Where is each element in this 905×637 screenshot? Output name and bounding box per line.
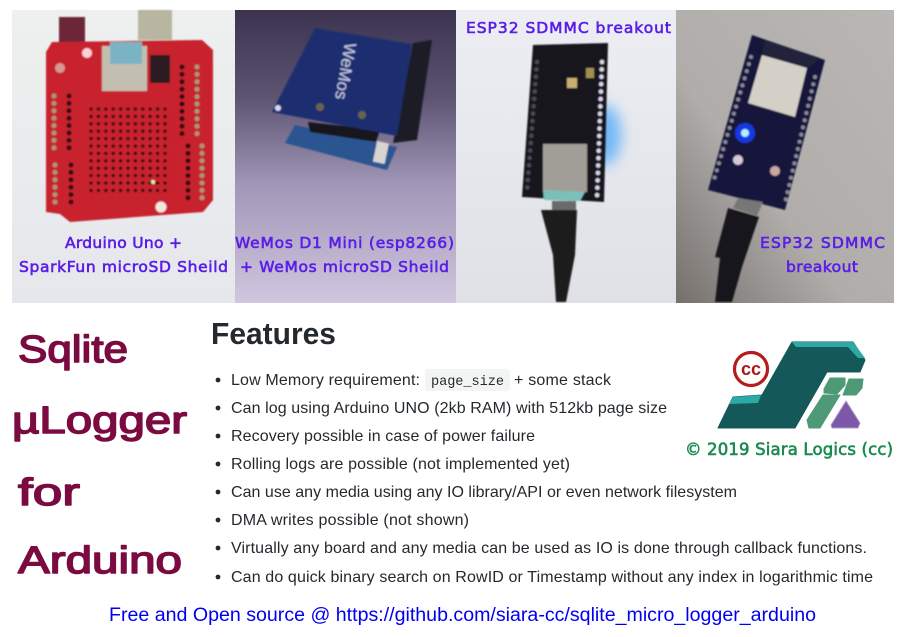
image: ESP32 dev board with cable <box>708 35 825 302</box>
title line 4: Arduino <box>18 540 182 582</box>
panel: ESP32 module photo <box>676 10 894 303</box>
caption: ESP32 SDMMC breakout: ESP32 SDMMC breakout <box>466 19 671 37</box>
bullet 5: Can use any media using any IO library/API or even network filesystem <box>231 484 737 501</box>
bullet 2: Can log using Arduino UNO (2kb RAM) with 512kb page size <box>231 400 667 417</box>
caption: WeMos D1 Mini: WeMos D1 Mini (esp8266) <box>235 234 454 252</box>
bullet 1: page_size <box>431 375 504 390</box>
bullet 4: Rolling logs are possible (not implemented yet) <box>231 456 570 473</box>
bullet 7: Virtually any board and any media can be used as IO is done through callback functions. <box>231 540 867 557</box>
image: black board with SD slot and cable <box>522 43 608 302</box>
image: WeMos D1 Mini board <box>272 28 432 170</box>
feature list <box>216 369 873 586</box>
image: WeMos D1 Mini board: WeMos <box>331 41 360 101</box>
caption: ESP32 SDMMC: ESP32 SDMMC <box>760 234 885 252</box>
logo shape: green blocks <box>807 378 863 428</box>
bullet 3: Recovery possible in case of power failure <box>231 428 535 445</box>
caption: SparkFun shield: SparkFun microSD Sheild <box>19 258 228 276</box>
logo: Siara Logics <box>685 342 893 459</box>
footer: source link text: Free and Open source @ https://github.com/siara-cc/sqlite_micro_logger_arduino <box>109 605 816 626</box>
bullet 1 <box>216 369 612 391</box>
title line 1: Sqlite <box>18 329 128 371</box>
logo shape: purple triangle <box>831 401 860 428</box>
caption: WeMos shield: + WeMos microSD Sheild <box>240 258 449 276</box>
title line 2: µLogger <box>12 400 187 442</box>
bullet 1: Low Memory requirement: <box>231 372 420 389</box>
panel: Arduino Uno photo <box>12 10 235 303</box>
caption: Arduino Uno: Arduino Uno + <box>65 234 182 252</box>
bullet 1: + some stack <box>514 372 612 389</box>
caption: breakout: breakout <box>786 258 858 276</box>
title: Sqlite uLogger for Arduino <box>12 329 187 582</box>
logo caption: © 2019 Siara Logics (cc) <box>685 440 893 459</box>
image: red SparkFun shield <box>46 10 213 222</box>
heading: Features: Features <box>211 316 336 351</box>
title line 3: for <box>18 472 80 514</box>
bullet 8: Can do quick binary search on RowID or Timestamp without any index in logarithmic time <box>231 569 873 586</box>
panel: WeMos photo <box>235 10 456 303</box>
panel: ESP32 SDMMC breakout photo <box>456 10 676 303</box>
icon: creative commons: cc <box>741 359 761 379</box>
bullet 6: DMA writes possible (not shown) <box>231 512 469 529</box>
icon: creative commons <box>734 352 768 386</box>
image: blue glow <box>589 105 621 165</box>
logo shape: teal S <box>718 342 865 428</box>
